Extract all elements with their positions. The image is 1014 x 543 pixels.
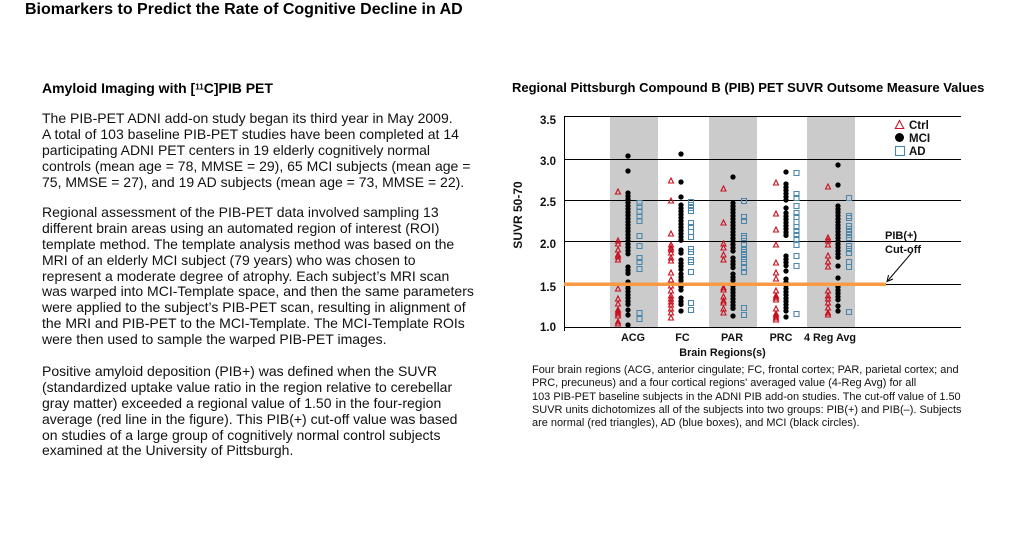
text block: regional assessment: represent a moderate degree of atrophy. Each subject’s MRI scan bbox=[42, 268, 449, 284]
text block: regional assessment: were applied to the subject’s PIB-PET scan, resulting in alignment of bbox=[42, 299, 466, 315]
y axis tick labels: 2.5 bbox=[540, 197, 557, 209]
figure caption: Four brain regions (ACG, anterior cingulate; FC, frontal cortex; PAR, parietal cortex; and bbox=[532, 364, 959, 376]
text block: regional assessment: the MRI and PIB-PET to the MCI-Template. The MCI-Template ROIs bbox=[42, 315, 465, 331]
figure caption: PRC, precuneus) and a four cortical regions' averaged value (4-Reg Avg) for all bbox=[532, 377, 916, 389]
text block: PIB positive definition: on studies of a large group of cognitively normal control subjects bbox=[42, 426, 440, 442]
y axis tick labels: 2.0 bbox=[540, 239, 556, 251]
text block: study overview: participating ADNI PET centers in 19 elderly cognitively normal bbox=[42, 142, 430, 158]
y axis tick labels: 3.5 bbox=[540, 115, 557, 127]
x axis category labels: PRC bbox=[770, 332, 793, 344]
cut-off label: PIB(+) bbox=[885, 230, 917, 242]
figure caption: SUVR units dichotomizes all of the subjects into two groups: PIB(+) and PIB(–). Subjects bbox=[532, 404, 962, 416]
cut-off label: Cut-off bbox=[885, 244, 921, 256]
figure caption: are normal (red triangles), AD (blue boxes), and MCI (black circles). bbox=[532, 417, 860, 429]
text block: study overview: A total of 103 baseline PIB-PET studies have been completed at 14 bbox=[42, 126, 459, 142]
chart heading: Regional Pittsburgh Compound B (PIB) PET SUVR Outsome Measure Values bbox=[512, 80, 984, 95]
PIB cut-off line bbox=[564, 282, 886, 286]
AD squares bbox=[637, 170, 852, 322]
y axis tick labels bbox=[540, 115, 557, 334]
x axis category labels: FC bbox=[675, 332, 690, 344]
text block: regional assessment: was warped into MCI-Template space, and then the same parameters bbox=[42, 283, 474, 299]
y axis tick labels: 1.5 bbox=[540, 282, 557, 294]
x axis category labels bbox=[621, 332, 856, 344]
legend bbox=[895, 120, 930, 158]
axes and grid lines bbox=[564, 116, 961, 331]
legend: Ctrl: Ctrl bbox=[909, 120, 929, 132]
text block: PIB positive definition: Positive amyloid deposition (PIB+) was defined when the SUVR bbox=[42, 363, 437, 379]
text block: study overview: The PIB-PET ADNI add-on study began its third year in May 2009. bbox=[42, 110, 453, 126]
text block: PIB positive definition bbox=[42, 363, 457, 458]
control triangles bbox=[616, 178, 830, 326]
MCI circles bbox=[628, 154, 838, 325]
text block: PIB positive definition: (standardized uptake value ratio in the region relative to cerebellar bbox=[42, 379, 452, 395]
text block: study overview: controls (mean age = 78, MMSE = 29), 65 MCI subjects (mean age = bbox=[42, 158, 470, 174]
x axis title: Brain Regions(s) bbox=[679, 347, 766, 359]
arrow to cut-off line bbox=[887, 253, 912, 282]
y axis tick labels: 3.0 bbox=[540, 156, 556, 168]
figure caption bbox=[532, 364, 962, 429]
cut-off label bbox=[885, 230, 921, 256]
x axis category labels: 4 Reg Avg bbox=[804, 332, 856, 344]
text block: PIB positive definition: examined at the University of Pittsburgh. bbox=[42, 442, 293, 458]
x axis category labels: ACG bbox=[621, 332, 645, 344]
title: Biomarkers to Predict the Rate of Cognitive Decline in AD bbox=[25, 1, 463, 18]
text block: regional assessment: different brain areas using an automated region of interest (ROI) bbox=[42, 220, 439, 236]
text block: study overview bbox=[42, 110, 470, 190]
y axis tick labels: 1.0 bbox=[540, 322, 556, 334]
x axis category labels: PAR bbox=[721, 332, 743, 344]
text block: regional assessment bbox=[42, 204, 474, 347]
text block: study overview: 75, MMSE = 27), and 19 AD subjects (mean age = 73, MMSE = 22). bbox=[42, 174, 464, 190]
left column heading: Amyloid Imaging with [11C]PIB PET bbox=[42, 80, 273, 96]
text block: regional assessment: MRI of an elderly MCI subject (79 years) who was chosen to bbox=[42, 252, 416, 268]
figure caption: 103 PIB-PET baseline subjects in the ADNI PIB add-on studies. The cut-off value of 1.50 bbox=[532, 391, 961, 403]
text block: PIB positive definition: average (red line in the figure). This PIB(+) cut-off value was based bbox=[42, 411, 457, 427]
text block: regional assessment: template method. The template analysis method was based on the bbox=[42, 236, 454, 252]
text block: regional assessment: were then used to sample the warped PIB-PET images. bbox=[42, 331, 386, 347]
text block: regional assessment: Regional assessment of the PIB-PET data involved sampling 13 bbox=[42, 204, 439, 220]
legend: AD: AD bbox=[909, 146, 926, 158]
text block: PIB positive definition: gray matter) exceeded a regional value of 1.50 in the four-region bbox=[42, 395, 441, 411]
shaded region bands bbox=[610, 116, 855, 327]
y axis title: SUVR 50-70 bbox=[511, 181, 525, 249]
legend: MCI: MCI bbox=[909, 133, 930, 145]
